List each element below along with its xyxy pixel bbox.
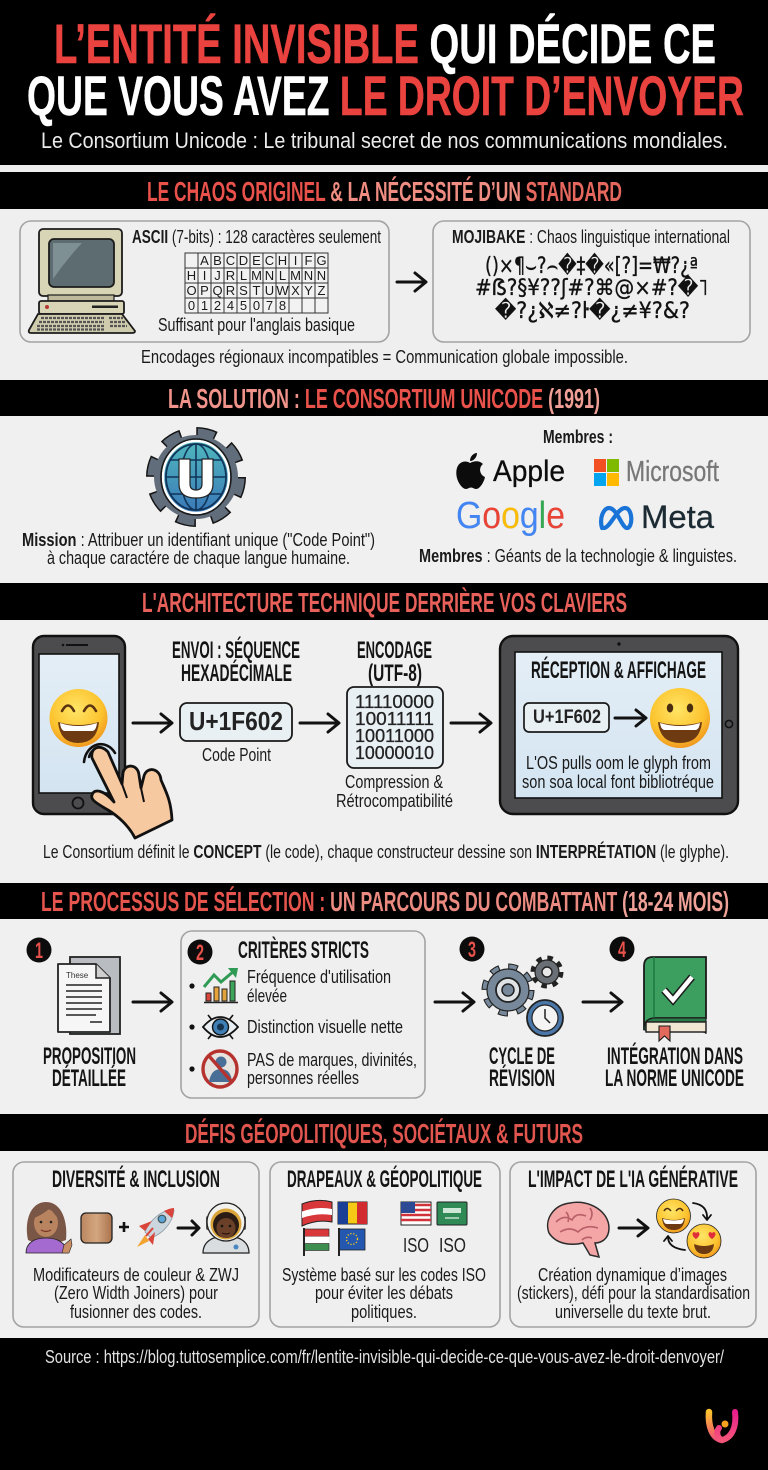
tablet caption xyxy=(522,753,714,792)
arrow: step 1 to 2 xyxy=(133,993,172,1011)
tablet caption: L'OS pulls oom le glyph from xyxy=(526,753,711,773)
panel: mojibake xyxy=(433,221,750,342)
logo: Google: Google xyxy=(456,495,565,537)
section: solution xyxy=(0,380,768,583)
icon: flag Romania xyxy=(338,1202,367,1224)
ASCII character table xyxy=(185,253,328,313)
members heading: Membres : xyxy=(543,427,613,447)
tablet caption: son soa local font bibliotréque xyxy=(522,772,714,792)
icon: flag Hungary xyxy=(304,1228,329,1256)
icon: gears and clock xyxy=(486,959,563,1036)
logo: Apple: Apple xyxy=(493,455,565,488)
number badge 4: 4 xyxy=(618,937,626,962)
binary box xyxy=(347,687,443,768)
logo xyxy=(709,1412,735,1440)
step heading: encoding: (UTF-8) xyxy=(368,660,422,687)
icon: smiling emoji xyxy=(650,688,710,748)
card heading: DIVERSITÉ & INCLUSION xyxy=(52,1165,220,1193)
card text: Modificateurs de couleur & ZWJ xyxy=(33,1265,239,1285)
arrow: step 2 to 3 xyxy=(435,993,474,1011)
mojibake glyph block xyxy=(475,252,708,324)
icon: Unicode gear globe xyxy=(153,434,239,520)
card text xyxy=(282,1265,486,1322)
ASCII heading: ASCII (7-bits) : 128 caractères seulement xyxy=(132,227,381,247)
ASCII character table: OPQRSTUWXYZ xyxy=(186,283,326,298)
section heading: solution: LA SOLUTION : LE CONSORTIUM UNICODE (1991) xyxy=(168,383,600,414)
number badge 4 xyxy=(610,936,634,962)
arrow: ASCII to mojibake xyxy=(397,273,426,291)
ISO labels: ISO xyxy=(439,1235,466,1257)
step 1: proposal xyxy=(26,938,136,1092)
card: flags xyxy=(270,1162,500,1327)
step heading: encoding: ENCODAGE xyxy=(357,637,432,664)
number badge 1: 1 xyxy=(35,938,43,963)
binary box: 11110000 xyxy=(355,692,434,712)
criterion: no brands: personnes réelles xyxy=(247,1068,359,1088)
step heading: sending: HEXADÉCIMALE xyxy=(181,659,292,687)
number badge 3 xyxy=(460,936,484,962)
icon: flag EU xyxy=(339,1228,365,1256)
card heading: DRAPEAUX & GÉOPOLITIQUE xyxy=(287,1165,482,1193)
criterion: visual distinction xyxy=(189,1015,403,1039)
arrow: chip to emoji xyxy=(615,710,646,726)
mission text xyxy=(22,530,375,568)
card text: (Zero Width Joiners) pour xyxy=(54,1283,218,1303)
arrow: step 3 to 4 xyxy=(583,993,622,1011)
card text xyxy=(33,1265,239,1322)
card text: Système basé sur les codes ISO xyxy=(282,1265,486,1285)
icon: grinning emoji xyxy=(50,689,108,747)
step heading: encoding xyxy=(357,637,432,687)
step 4 label xyxy=(605,1042,744,1092)
section heading: solution xyxy=(0,380,768,416)
mojibake glyph block: #ẞ?§¥??ʃ#?⌘@×#?�˥ xyxy=(475,274,708,301)
encoding caption xyxy=(336,772,453,811)
code point chip: U+1F602 xyxy=(533,707,601,728)
icon: heart eyes emoji xyxy=(687,1224,721,1258)
criterion: no brands xyxy=(189,1050,417,1088)
step heading: sending xyxy=(172,636,300,687)
criterion: visual distinction: Distinction visuelle nette xyxy=(247,1017,403,1037)
step 1 label xyxy=(43,1043,136,1092)
step 3: revision xyxy=(460,936,563,1092)
section: architecture xyxy=(0,583,768,883)
chaos conclusion: Encodages régionaux incompatibles = Communication globale impossible. xyxy=(141,347,628,367)
icon: astronaut xyxy=(203,1203,249,1253)
logo: Meta: Meta xyxy=(641,499,714,535)
section heading: chaos xyxy=(0,172,768,209)
panel: ASCII xyxy=(20,221,389,342)
chaos panel background xyxy=(0,209,768,380)
mojibake glyph block: ()×¶⌣?⌢�‡�«[?]=₩?¿ª xyxy=(485,252,698,279)
title xyxy=(27,12,744,127)
step 3 label: CYCLE DE xyxy=(489,1043,555,1070)
card text: universelle du texte brut. xyxy=(555,1302,711,1322)
section: challenges xyxy=(0,1114,768,1338)
criteria heading: CRITÈRES STRICTS xyxy=(238,936,369,964)
section heading: architecture xyxy=(0,583,768,620)
icon: eye xyxy=(203,1015,238,1039)
step heading: sending: ENVOI : SÉQUENCE xyxy=(172,636,300,664)
icon: phone with emoji xyxy=(33,636,125,814)
step 1 label: DÉTAILLÉE xyxy=(52,1064,126,1092)
icon: rocket xyxy=(137,1208,174,1247)
architecture panel background xyxy=(0,620,768,883)
section: chaos xyxy=(0,172,768,380)
icon: green book xyxy=(644,957,706,1041)
section divider band xyxy=(0,165,768,172)
icon: skin tone swatch xyxy=(81,1213,112,1243)
process panel background xyxy=(0,919,768,1114)
step 4: integration xyxy=(605,936,744,1092)
icon: document xyxy=(58,957,120,1034)
logo: Microsoft: Microsoft xyxy=(626,456,719,488)
arrow: code point to encoding xyxy=(300,714,339,732)
logo: Microsoft xyxy=(594,456,719,488)
mission text: Mission : Attribuer un identifiant unique ("Code Point") xyxy=(22,530,375,550)
step 1 label: PROPOSITION xyxy=(43,1043,136,1070)
tablet xyxy=(500,636,738,814)
card text: pour éviter les débats xyxy=(315,1283,453,1303)
ASCII caption: Suffisant pour l'anglais basique xyxy=(158,315,355,335)
code point caption: Code Point xyxy=(202,745,271,765)
solution panel background xyxy=(0,416,768,583)
icon: document: These xyxy=(66,971,89,980)
icon: flag Saudi Arabia xyxy=(437,1202,467,1225)
icon: flag Austria xyxy=(302,1200,332,1226)
icon: retro computer xyxy=(29,229,135,333)
logo: Apple xyxy=(456,453,565,489)
number badge 3: 3 xyxy=(468,937,476,962)
criterion: frequency: élevée xyxy=(247,986,287,1006)
binary box: 10011000 xyxy=(355,726,434,746)
icon: flag USA xyxy=(401,1202,431,1225)
criterion: no brands: PAS de marques, divinités, xyxy=(247,1050,417,1070)
section heading: chaos: LE CHAOS ORIGINEL & LA NÉCESSITÉ D’UN STANDARD xyxy=(147,176,622,207)
icon: brain xyxy=(548,1202,609,1257)
encoding caption: Rétrocompatibilité xyxy=(336,791,453,811)
code point box: U+1F602 xyxy=(189,706,283,736)
number badge 2: 2 xyxy=(196,940,204,965)
card: diversity xyxy=(13,1162,259,1327)
mission text: à chaque caractére de chaque langue humaine. xyxy=(47,548,350,568)
criterion: frequency: Fréquence d'utilisation xyxy=(247,967,391,987)
header xyxy=(27,12,744,153)
footer xyxy=(45,1347,735,1440)
number badge 1 xyxy=(26,938,52,963)
step 3 label xyxy=(489,1043,555,1092)
icon: grinning emoji small xyxy=(656,1199,690,1233)
card text xyxy=(517,1265,750,1322)
arrow: to astronaut xyxy=(178,1221,199,1235)
ASCII character table: ABCDECHIFG xyxy=(200,253,327,268)
ISO labels: ISO xyxy=(403,1235,429,1257)
ISO labels xyxy=(403,1235,466,1257)
plus sign xyxy=(119,1222,129,1232)
card: generative AI xyxy=(510,1162,756,1327)
icon: woman xyxy=(26,1202,72,1253)
arrow: phone to code point xyxy=(133,714,172,732)
step 3 label: RÉVISION xyxy=(489,1064,555,1092)
encoding caption: Compression & xyxy=(345,772,443,792)
ASCII character table: HIJRLMNLMNN xyxy=(187,268,326,283)
section: selection process xyxy=(0,883,768,1114)
logo: Meta xyxy=(601,499,714,535)
number badge 2 xyxy=(188,940,212,965)
mojibake glyph block: �?¿ℵ≠?ŀ�¿≠¥?&? xyxy=(495,297,690,324)
card text: politiques. xyxy=(351,1302,417,1322)
binary box: 10011111 xyxy=(355,709,434,729)
arrow: encoding to tablet xyxy=(451,714,491,732)
icon: pointing hand xyxy=(84,744,172,838)
criterion: frequency xyxy=(189,967,391,1006)
icon: prohibited person xyxy=(203,1051,237,1087)
arrows: emoji cycle xyxy=(664,1203,711,1250)
challenges panel background xyxy=(0,1151,768,1338)
step 2: criteria panel xyxy=(181,931,425,1098)
icon: growth chart xyxy=(204,968,238,1002)
code point chip xyxy=(524,703,609,732)
architecture conclusion: Le Consortium définit le CONCEPT (le code), chaque constructeur dessine son INTERPRÉTATION (le glyphe). xyxy=(43,841,729,862)
card text: fusionner des codes. xyxy=(70,1302,202,1322)
arrow: brain to emoji xyxy=(619,1220,648,1236)
binary box: 10000010 xyxy=(355,743,434,763)
ASCII character table: 01245078 xyxy=(188,298,286,313)
section heading: challenges xyxy=(0,1114,768,1151)
